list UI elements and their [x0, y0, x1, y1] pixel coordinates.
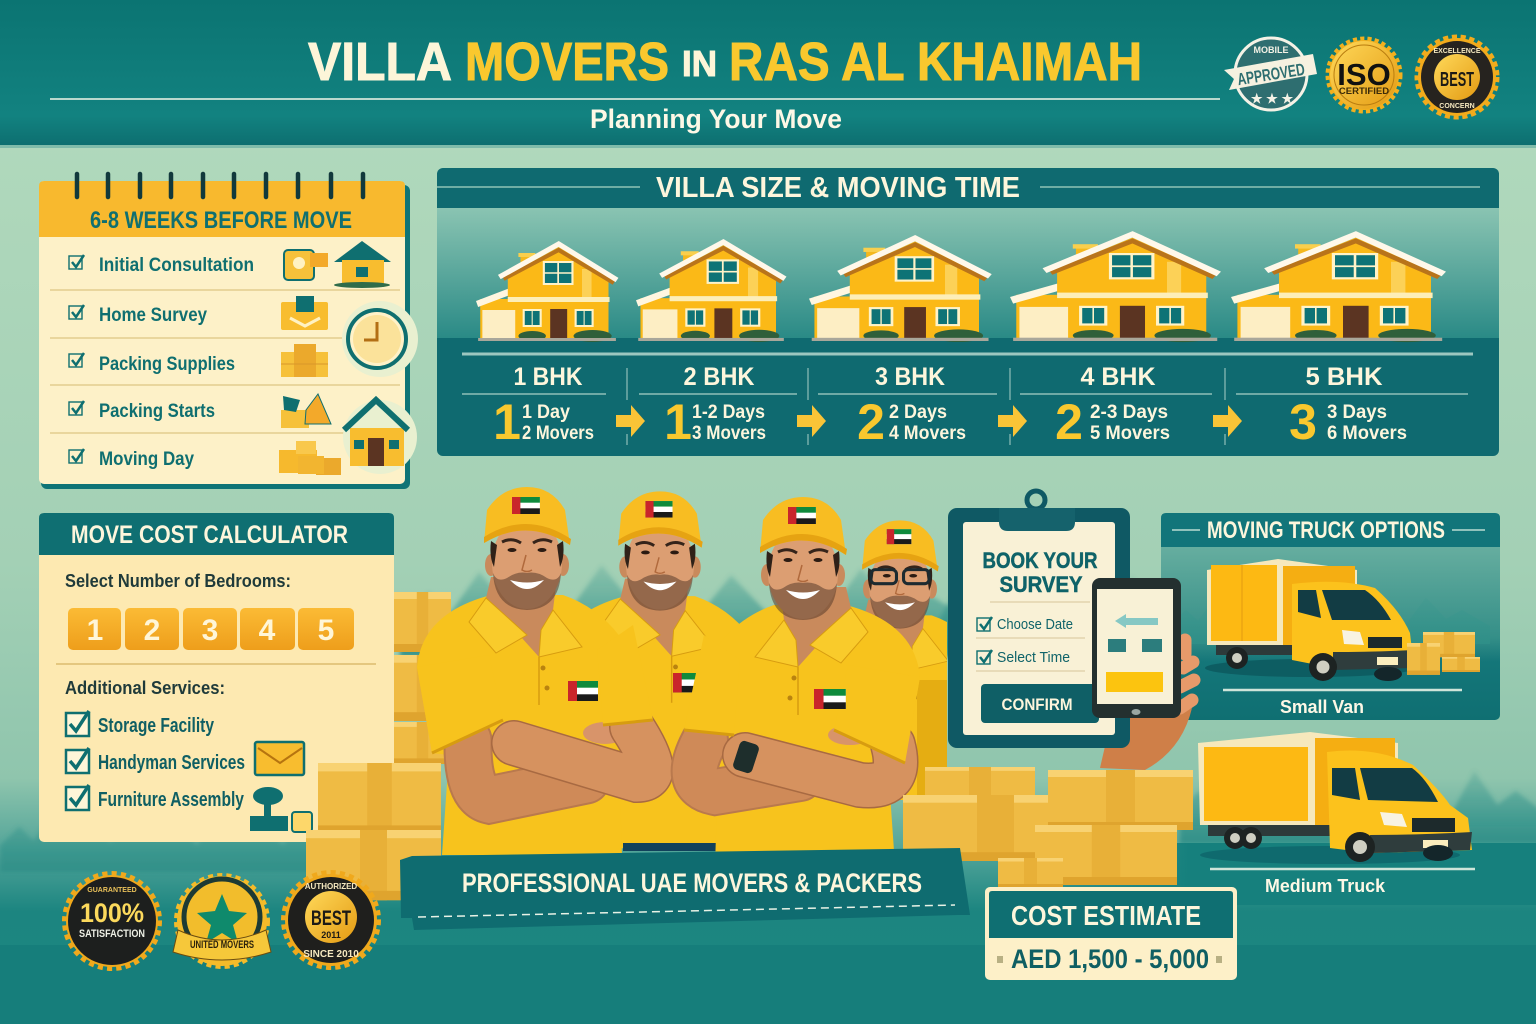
- badge: best since: BEST: [311, 907, 351, 930]
- moving boxes front right: [903, 767, 1193, 888]
- icon: packing: [281, 394, 331, 428]
- phone: [1092, 578, 1181, 718]
- service options: Handyman Services: [98, 752, 245, 774]
- banner: professional movers: [400, 848, 970, 930]
- clipboard clip: [999, 491, 1075, 531]
- header band: [0, 0, 1536, 148]
- column: 4 BHK: 5 Movers: [1090, 423, 1170, 444]
- column: 1 BHK: [493, 363, 594, 450]
- column: 5 BHK: 5 BHK: [1306, 363, 1382, 391]
- badge: ISO certified: CERTIFIED: [1339, 86, 1389, 97]
- badge: ISO certified: ISO: [1337, 57, 1391, 92]
- column: 2 BHK: 2 BHK: [684, 363, 754, 391]
- badge: best: EXCELLENCE: [1433, 48, 1481, 55]
- badge: 100% satisfaction: GUARANTEED: [87, 887, 137, 894]
- bedroom buttons: 1: [87, 614, 103, 647]
- column: 2 BHK: 3 Movers: [692, 423, 766, 444]
- column: 2 BHK: [664, 363, 766, 450]
- confirm button: CONFIRM: [1002, 695, 1072, 714]
- bedroom buttons: 3: [202, 614, 218, 647]
- truck panel trees: [1170, 595, 1490, 644]
- column: 2 BHK: 1-2 Days: [692, 402, 765, 423]
- icon: envelope: [255, 742, 304, 775]
- panel: move cost calculator: [39, 513, 394, 842]
- moving boxes front left: [306, 763, 441, 900]
- title: RAS AL KHAIMAH: [729, 32, 1142, 92]
- title: MOVERS: [465, 32, 669, 92]
- survey heading: BOOK YOUR: [982, 548, 1098, 573]
- badge: approved: MOBILE: [1254, 45, 1288, 55]
- column: 3 BHK: 2: [857, 394, 885, 450]
- sky area: [437, 208, 1499, 338]
- subtitle: Planning Your Move: [590, 104, 842, 134]
- column: 5 BHK: [1289, 363, 1407, 450]
- confirm button: [981, 684, 1099, 723]
- house: 1 BHK: [476, 244, 617, 342]
- badge: approved: [1224, 38, 1317, 110]
- survey options: Choose Date: [997, 616, 1073, 633]
- panel: book your survey clipboard: SURVEY: [1000, 572, 1083, 597]
- title: [308, 32, 1142, 92]
- checklist items: Packing Supplies: [99, 354, 235, 375]
- section heading: VILLA SIZE & MOVING TIME: [656, 172, 1020, 204]
- arrow: [998, 405, 1027, 437]
- badge: best: CONCERN: [1439, 103, 1475, 110]
- house: 4 BHK: [1010, 234, 1219, 342]
- badge: best since: [285, 874, 377, 966]
- icon: house small: [334, 241, 391, 288]
- bedroom buttons: 5: [318, 614, 334, 647]
- column: 3 BHK: 3 BHK: [875, 363, 945, 391]
- truck panel header: [1161, 513, 1500, 547]
- arrow: [616, 405, 645, 437]
- badge: 100% satisfaction: 100%: [80, 898, 144, 928]
- icon: consultation: [284, 250, 328, 280]
- icon: moving boxes: [279, 441, 341, 475]
- house: 5 BHK: [1231, 234, 1444, 342]
- checklist items: Packing Starts: [99, 401, 215, 422]
- survey options: [977, 616, 1073, 666]
- moving boxes behind team: [394, 592, 451, 764]
- badge: best since: 2011: [321, 930, 341, 940]
- arrow: [797, 405, 826, 437]
- icon: survey box: [281, 296, 328, 330]
- badge: best: [1418, 38, 1496, 116]
- icon: supplies boxes: [281, 344, 328, 377]
- column: 1 BHK: 1 BHK: [514, 363, 582, 391]
- bedroom buttons: 4: [259, 614, 276, 647]
- column: 5 BHK: 3 Days: [1327, 402, 1387, 423]
- team member: back left: [553, 491, 782, 851]
- column: 3 BHK: 2 Days: [889, 402, 947, 423]
- column: 4 BHK: 4 BHK: [1080, 363, 1156, 391]
- cost estimate box: COST ESTIMATE: [1011, 900, 1201, 931]
- checklist items: Moving Day: [99, 449, 194, 470]
- truck panel heading: MOVING TRUCK OPTIONS: [1207, 517, 1445, 544]
- truck ground: [1040, 843, 1536, 905]
- checklist items: Initial Consultation: [99, 255, 254, 276]
- additional services label: Additional Services:: [65, 677, 225, 698]
- medium truck label: Medium Truck: [1265, 876, 1386, 896]
- badge: 100% satisfaction: SATISFACTION: [79, 928, 145, 940]
- icon: tools: [250, 787, 312, 832]
- house: 3 BHK: [809, 238, 990, 342]
- badge: approved: APPROVED: [1236, 60, 1306, 89]
- background tree line: [0, 565, 1536, 872]
- column: 5 BHK: 3: [1289, 394, 1317, 450]
- column: 1 BHK: 2 Movers: [522, 423, 594, 444]
- team member: back right with glasses: [862, 520, 947, 800]
- checklist items: [69, 255, 254, 470]
- title: IN: [682, 43, 717, 84]
- service options: [66, 711, 245, 811]
- hand holding phone: [1100, 640, 1194, 770]
- team member: front right: [684, 497, 920, 865]
- small van: [1205, 559, 1415, 681]
- boxes beside van: [1407, 632, 1480, 675]
- column: 1 BHK: 1 Day: [522, 402, 570, 423]
- badge: best since: AUTHORIZED: [305, 882, 357, 891]
- medium truck: [1198, 732, 1472, 864]
- badge: star: UNITED MOVERS: [190, 939, 254, 951]
- panel: book your survey clipboard: [948, 491, 1130, 748]
- banner: professional movers: PROFESSIONAL UAE MOVERS & PACKERS: [462, 868, 922, 898]
- column: 1 BHK: 1: [493, 394, 521, 450]
- survey options: Select Time: [997, 649, 1070, 666]
- checklist header: [39, 181, 405, 237]
- bedroom buttons: 2: [144, 614, 160, 647]
- clipboard paper: [963, 522, 1115, 735]
- title underline: [50, 98, 1220, 100]
- badge: approved: ★ ★ ★: [1251, 91, 1293, 106]
- badge: 100% satisfaction: [66, 875, 158, 967]
- calendar rings: [77, 174, 363, 197]
- bottom teal band: [0, 945, 1536, 1024]
- house: 2 BHK: [636, 242, 785, 342]
- panel: moving truck options: [1161, 513, 1500, 720]
- column: 3 BHK: [857, 363, 966, 450]
- bedroom buttons: [68, 608, 354, 650]
- icon: house with halo: [343, 400, 417, 474]
- column: 4 BHK: [1055, 363, 1170, 450]
- service options: Storage Facility: [98, 715, 215, 737]
- column: 4 BHK: 2-3 Days: [1090, 402, 1168, 423]
- calculator header: [39, 513, 394, 555]
- badge: best since: SINCE 2010: [303, 949, 359, 960]
- small van label: Small Van: [1280, 697, 1364, 717]
- panel: 6-8 weeks checklist: [39, 174, 418, 489]
- column: 2 BHK: 1: [664, 394, 692, 450]
- badge: best: BEST: [1440, 69, 1474, 91]
- panel: villa size and moving time: [437, 168, 1499, 456]
- title: VILLA: [308, 32, 452, 92]
- icon: clock: [342, 301, 418, 377]
- checklist items: Home Survey: [99, 305, 207, 326]
- column: 3 BHK: 4 Movers: [889, 423, 966, 444]
- arrow: [1213, 405, 1242, 437]
- column: 5 BHK: 6 Movers: [1327, 423, 1407, 444]
- service options: Furniture Assembly: [98, 789, 245, 811]
- badge: star: [173, 876, 271, 966]
- column: 4 BHK: 2: [1055, 394, 1083, 450]
- calculator heading: MOVE COST CALCULATOR: [71, 521, 348, 549]
- team member: front left: [417, 487, 653, 855]
- checklist heading: 6-8 WEEKS BEFORE MOVE: [90, 207, 352, 234]
- cost estimate box: AED 1,500 - 5,000: [1011, 944, 1209, 974]
- cost estimate box: [985, 887, 1237, 980]
- bedroom label: Select Number of Bedrooms:: [65, 570, 291, 591]
- badge: ISO certified: [1329, 40, 1399, 110]
